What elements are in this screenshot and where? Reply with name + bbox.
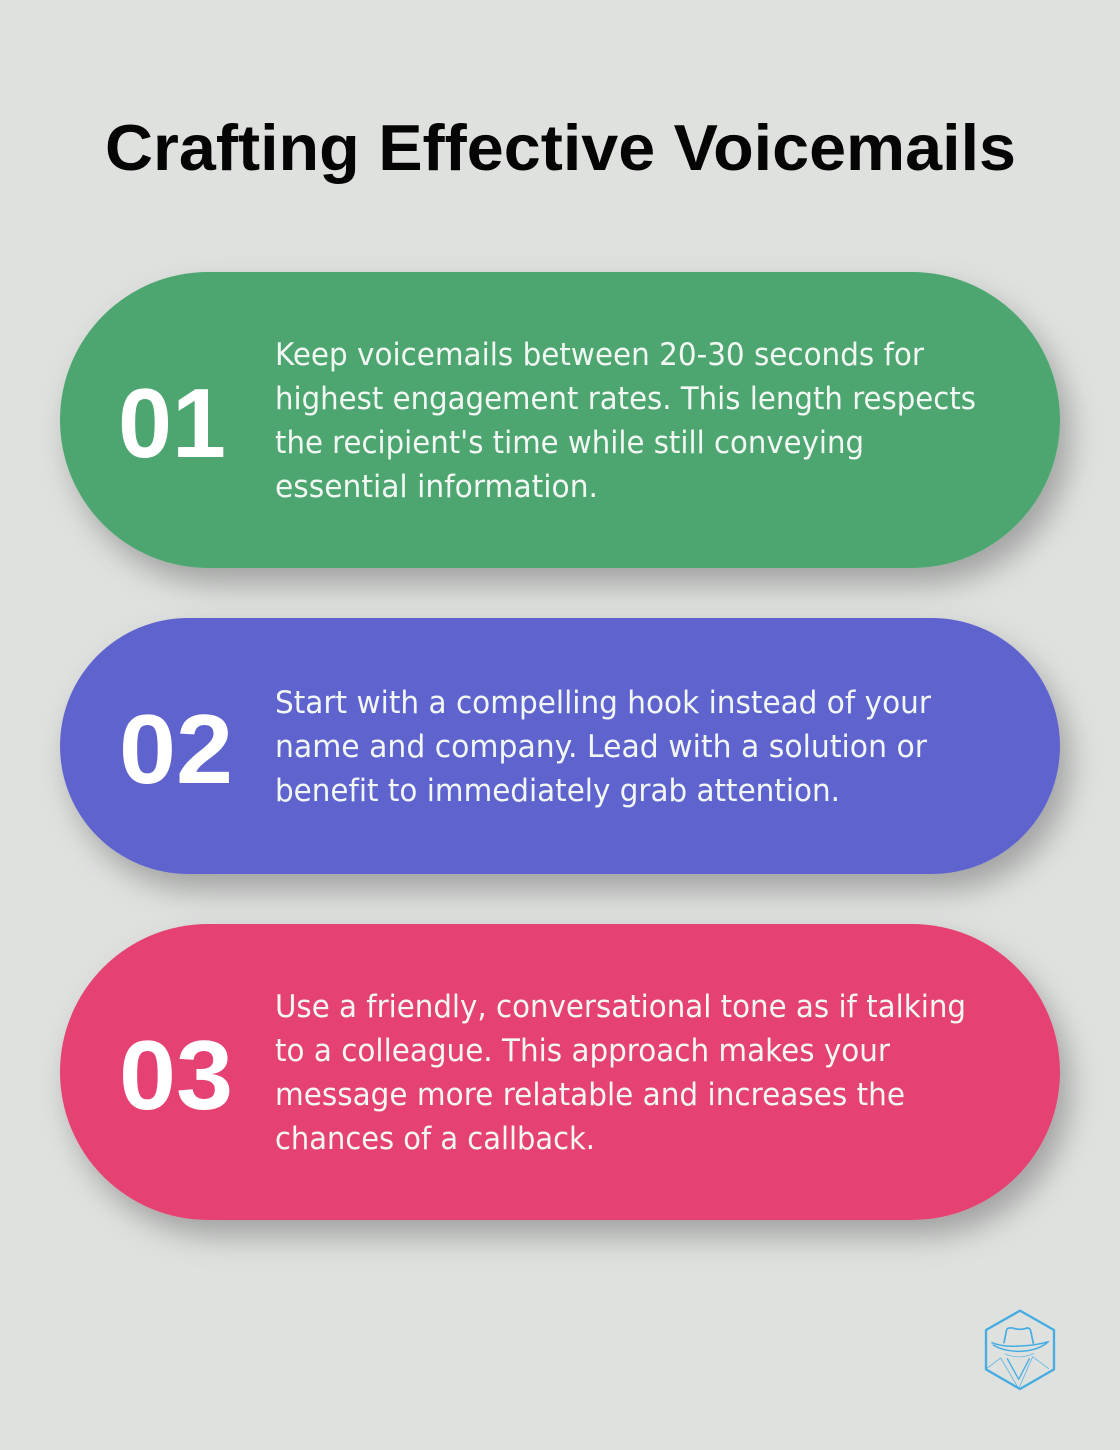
step number 02: 02 xyxy=(119,694,233,804)
text block: step 02: Start with a compelling hook instead of your xyxy=(275,685,931,721)
text block: step 02: benefit to immediately grab attention. xyxy=(275,773,840,809)
text block: step 02 xyxy=(275,685,931,809)
title: Crafting Effective Voicemails xyxy=(105,111,1016,184)
panel: step 01 xyxy=(60,272,1060,568)
panel: step 03 xyxy=(60,924,1060,1220)
text block: step 01 xyxy=(275,337,976,505)
step number 01: 01 xyxy=(118,368,226,478)
step number 03: 03 xyxy=(119,1020,233,1130)
icon: spy logo hexagon xyxy=(986,1311,1054,1389)
text block: step 03: message more relatable and increases the xyxy=(275,1077,905,1113)
text block: step 02: name and company. Lead with a solution or xyxy=(275,729,927,765)
text block: step 03: Use a friendly, conversational tone as if talking xyxy=(275,989,966,1025)
text block: step 01: highest engagement rates. This length respects xyxy=(275,381,976,417)
text block: step 03 xyxy=(275,989,966,1157)
panel: step 02 xyxy=(60,618,1060,874)
text block: step 03: chances of a callback. xyxy=(275,1121,595,1157)
text block: step 03: to a colleague. This approach makes your xyxy=(275,1033,890,1069)
text block: step 01: Keep voicemails between 20-30 seconds for xyxy=(275,337,924,373)
text block: step 01: essential information. xyxy=(275,469,598,505)
pill: pink xyxy=(60,924,1060,1220)
pill: green xyxy=(60,272,1060,568)
pill: blue xyxy=(60,618,1060,874)
text block: step 01: the recipient's time while still conveying xyxy=(275,425,864,461)
